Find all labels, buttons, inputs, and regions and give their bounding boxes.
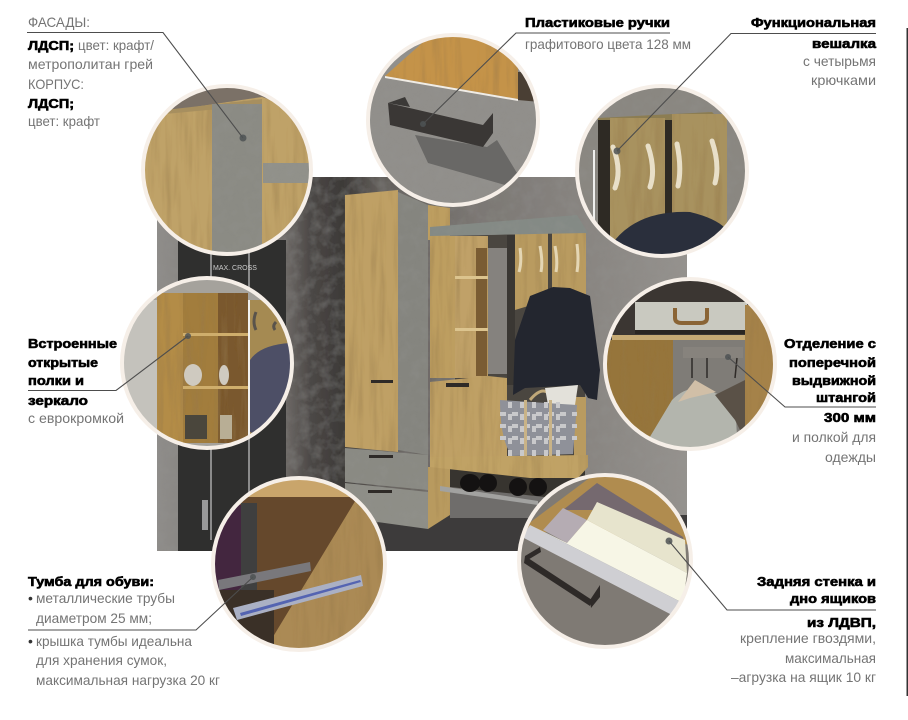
callout: pull-out rail compartment: 300 мм [824,410,876,425]
detail circle: drawer bottom [515,470,695,650]
callout: open shelves and mirror: открытые [28,355,98,370]
detail circle: pull-out rail [603,275,778,455]
callout: open shelves and mirror: с еврокромкой [28,410,124,426]
callout: drawer back and bottom: Задняя стенка и [757,574,876,589]
wall background [157,177,687,551]
callout: open shelves and mirror: зеркало [28,393,88,408]
right edge rule [906,28,908,696]
callout: shoe cabinet: металлические трубы [36,590,175,606]
detail circle: coat hooks [575,85,750,262]
callout: drawer back and bottom: максимальная [785,650,876,666]
leader line: coat rack [617,34,876,151]
hook panels [515,231,586,458]
callout: pull-out rail compartment: штангой [816,390,876,405]
leader dot: shelves [185,333,191,339]
dark poster wall [178,240,286,551]
callout: functional coat rack [614,15,877,154]
callout: functional coat rack: с четырьмя [803,53,876,69]
detail circle: shoe rack pipes [210,475,390,655]
wardrobe door [345,190,398,452]
callout: shoe cabinet: максимальная нагрузка 20 кг [36,672,220,688]
panel: room photo with hallway furniture [157,177,687,551]
hanger back panel [455,232,585,460]
leader line: shelves [28,336,188,390]
callout: open shelves and mirror [28,333,191,426]
callout: shoe cabinet: Тумба для обуви: [28,574,154,589]
jacket [513,287,600,400]
callout: drawer back and bottom [666,538,876,685]
bench top [430,455,588,478]
wardrobe concrete column [398,192,428,455]
callout: functional coat rack: вешалка [812,36,877,51]
leader dot: rail [725,354,731,360]
leader line: handles [423,33,670,124]
callout: facades and body: цвет: крафт [28,113,101,129]
callout: pull-out rail compartment: одежды [825,449,876,465]
callout: drawer back and bottom: дно ящиков [790,591,876,606]
callout: pull-out rail compartment: Отделение с [784,336,876,351]
detail circle: handle [365,30,540,210]
callout: open shelves and mirror: Встроенные [28,336,117,351]
callout: shoe cabinet: • [28,633,33,649]
callout: plastic handles [420,15,691,127]
callout: pull-out rail compartment: поперечной [789,355,876,370]
callout: pull-out rail compartment: выдвижной [792,373,876,388]
dark poster wall: MAX. CROSS [213,265,257,272]
callout: facades and body [27,14,246,142]
callout: drawer back and bottom: из ЛДВП, [807,615,876,630]
shoe rack [440,468,585,505]
callout: shoe cabinet: диаметром 25 мм; [36,610,152,626]
callout: shoe cabinet: для хранения сумок, [36,652,167,668]
drawers [345,448,450,529]
callout: shoe cabinet: • [28,590,33,606]
callout: pull-out rail compartment [725,336,876,465]
callout: plastic handles: Пластиковые ручки [525,15,670,30]
callout: pull-out rail compartment: и полкой для [792,429,876,445]
callout: facades and body: КОРПУС: [28,76,84,92]
bench cabinet [430,376,507,460]
concrete plinth behind shoes [450,490,580,518]
detail circle: open shelves [120,275,295,450]
callout: shoe cabinet [28,574,256,688]
callout: facades and body: цвет: крафт/ [78,37,154,53]
callout: facades and body: ЛДСП; [28,38,74,53]
callout: plastic handles: графитового цвета 128 мм [525,36,691,52]
tote bag [500,385,578,456]
leader line: shoe cabinet [28,577,253,630]
floor [377,515,687,551]
callout: drawer back and bottom: –агрузка на ящик 10 кг [731,669,876,685]
leader line: facades [27,32,243,138]
leader dot: handles [420,121,426,127]
leader dot: facades [240,134,246,142]
leader dot: shoe cabinet [250,574,256,580]
concrete top shelf [430,215,588,236]
wardrobe oak side [428,205,450,240]
callout: shoe cabinet: крышка тумбы идеальна [36,633,192,649]
callout: facades and body: ФАСАДЫ: [28,14,90,30]
callout: functional coat rack: Функциональная [751,15,876,30]
callout: functional coat rack: крючками [811,72,876,88]
open shelves [455,235,515,385]
oak left hanger post [430,236,455,378]
door handle [371,380,393,383]
leader dot: coat rack [614,148,620,154]
callout: facades and body: метрополитан грей [28,56,153,72]
callout: open shelves and mirror: полки и [28,373,84,388]
leader line: rail [728,357,876,407]
callout: facades and body: ЛДСП; [28,96,74,111]
detail circle: facade materials [140,85,315,260]
leader dot: drawer [666,538,672,544]
callout: drawer back and bottom: крепление гвоздями, [740,630,876,646]
leader line: drawer [669,541,876,610]
